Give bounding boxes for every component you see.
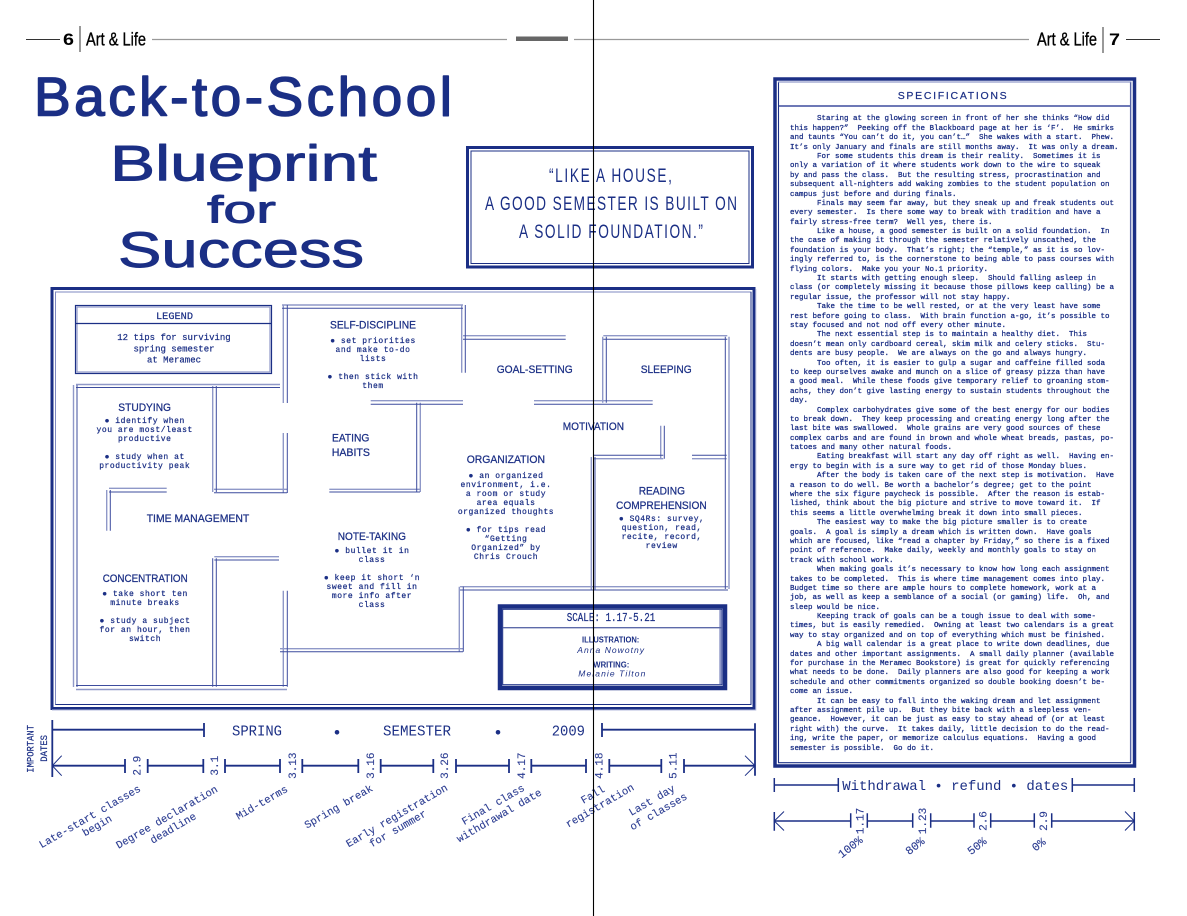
room: self-discipline: ● then stick with	[328, 373, 418, 382]
room: reading comprehension: question, read,	[622, 524, 702, 533]
room: sleeping: SLEEPING	[641, 364, 692, 376]
room: organization: “Getting	[485, 535, 527, 544]
room: eating habits	[332, 432, 370, 459]
room: motivation: MOTIVATION	[563, 421, 624, 433]
room: note-taking: ● keep it short ‘n	[324, 574, 420, 583]
room: reading comprehension: COMPREHENSION	[616, 500, 707, 512]
floor plan walls	[74, 305, 729, 690]
refund percentages: 80%	[903, 835, 928, 859]
room: organization	[458, 454, 554, 562]
title: Back-to-School	[34, 66, 452, 128]
room: studying	[97, 402, 193, 471]
room: reading comprehension: review	[646, 542, 678, 551]
room: concentration: ● study a subject	[100, 617, 190, 626]
title	[34, 66, 452, 278]
date ticks: 4.18	[594, 752, 606, 779]
room: organization: ● an organized	[469, 472, 543, 481]
room: self-discipline: them	[362, 382, 384, 391]
room: studying: STUDYING	[118, 402, 171, 414]
semester banner: 2009	[552, 724, 585, 740]
date descriptions: Late-start classes	[38, 784, 143, 852]
date descriptions: Early registration	[345, 783, 450, 851]
room: eating habits: EATING	[332, 432, 369, 444]
room: reading comprehension	[616, 486, 707, 551]
room: self-discipline: SELF-DISCIPLINE	[330, 319, 416, 331]
room: note-taking: ● bullet it in	[335, 547, 409, 556]
date descriptions: Degree declaration	[115, 784, 220, 852]
room: concentration: ● take short ten	[102, 590, 188, 599]
blueprint panel frame	[52, 288, 756, 710]
date descriptions: Spring break	[303, 783, 376, 832]
date descriptions: Final class	[460, 783, 527, 829]
refund percentages: 100%	[836, 834, 866, 862]
withdrawal date ticks: 2.6	[978, 811, 990, 831]
date descriptions	[38, 782, 690, 852]
room: studying: productivity peak	[99, 462, 190, 471]
title: Success	[118, 222, 364, 278]
date descriptions: registration	[564, 782, 637, 831]
timeline rules	[52, 720, 755, 777]
specifications panel frame	[775, 79, 1134, 766]
room: note-taking: class	[359, 556, 385, 565]
room: note-taking: NOTE-TAKING	[338, 531, 406, 543]
date descriptions: Last day	[627, 783, 678, 819]
withdrawal date ticks	[856, 808, 1051, 834]
refund percentages: 50%	[965, 835, 990, 859]
room: organization: Organized” by	[471, 544, 541, 553]
center page fold line	[592, 0, 594, 916]
room: organization: a room or study	[466, 490, 546, 499]
room: concentration: CONCENTRATION	[103, 573, 188, 585]
date ticks: 2.9	[132, 756, 144, 776]
page header left: Art & Life	[86, 30, 146, 50]
side label: important dates: IMPORTANT	[26, 725, 38, 773]
date descriptions: Mid-terms	[235, 784, 290, 823]
room: goal-setting: GOAL-SETTING	[497, 364, 573, 376]
room: organization: area equals	[477, 499, 535, 508]
withdrawal rules	[774, 778, 1134, 831]
legend box: at Meramec	[147, 355, 201, 365]
room: self-discipline: ● set priorities	[330, 337, 416, 346]
page header right: 7	[1109, 30, 1120, 49]
side label: important dates	[26, 725, 51, 773]
room: reading comprehension: recite, record,	[622, 533, 702, 542]
room: eating habits: HABITS	[332, 447, 370, 459]
room: concentration: switch	[129, 635, 161, 644]
date ticks: 5.11	[668, 752, 680, 779]
scale and credits box: ILLUSTRATION:	[582, 635, 639, 644]
withdrawal date ticks: 1.23	[918, 808, 930, 834]
date descriptions: of classes	[628, 792, 690, 834]
date descriptions: deadline	[149, 811, 199, 847]
date ticks: 3.26	[440, 752, 452, 779]
date ticks	[132, 752, 680, 779]
date descriptions: for summer	[368, 809, 429, 851]
semester banner: SPRING	[232, 724, 282, 740]
scale and credits box: Anna Nowotny	[576, 645, 645, 655]
legend box	[76, 306, 272, 374]
room: organization: environment, i.e.	[461, 481, 551, 490]
room: concentration: minute breaks	[110, 599, 180, 608]
room: studying: ● identify when	[105, 417, 185, 426]
room: self-discipline: lists	[360, 355, 386, 364]
date ticks: 3.16	[366, 752, 378, 779]
withdrawal date ticks: 1.17	[856, 808, 868, 834]
legend box: 12 tips for surviving	[117, 333, 231, 343]
refund percentages: 0%	[1030, 836, 1049, 855]
date descriptions: withdrawal date	[455, 788, 544, 846]
scale and credits box: SCALE: 1.17-5.21	[567, 612, 655, 625]
date descriptions: Fall	[579, 784, 608, 807]
withdrawal banner: Withdrawal • refund • dates	[842, 779, 1068, 795]
room: organization: ● for tips read	[466, 526, 546, 535]
pull quote box: “LIKE A HOUSE,	[549, 165, 672, 187]
room: self-discipline	[328, 319, 418, 391]
specifications article text: Staring at the glowing screen in front of her she thinks “How did this happen?” Peeking off the Blackboard page at her is ‘F’. He smirks and taunts “You can’t do it, you can’t…” She wakes with a start. Phew. It’s only January and finals are still months away. It was only a dream. For some students this dream is their reality. Sometimes it is only a variation of it where students work down to the wire to squeak by and pass the class. But the resulting stress, procrastination and subsequent all-nighters add waking zombies to the student population on campus just before and during finals. Finals may seem far away, but they sneak up and freak students out every semester. Is there some way to break with tradition and have a fairly stress-free term? Well yes, there is. Like a house, a good semester is built on a solid foundation. In the case of making it through the semester relatively unscathed, the foundation is your body. That’s right; the “temple,” as it is so lov- ingly referred to, is the cornerstone to being able to pass courses with flying colors. Make you your No.1 priority. It starts with getting enough sleep. Should falling asleep in class (or completely missing it because those pillows keep calling) be a regular issue, the professor will not stay happy. Take the time to be well rested, or at the very least have some rest before going to class. With brain function a-go, it’s possible to stay focused and not nod off every other minute. The next essential step is to maintain a healthy diet. This doesn’t mean only cardboard cereal, skim milk and celery sticks. Stu- dents are busy people. We are always on the go and always hungry. Too often, it is easier to gulp a sugar and caffeine filled soda to keep ourselves awake and munch on a slice of greasy pizza than have a good meal. While these foods give temporary relief to groaning stom- achs, they don’t give lasting energy to sustain students throughout the day. Complex carbohydrates give some of the best energy for our bodies to break down. They keep processing and creating energy long after the last bite was swallowed. Whole grains are very good sources of these complex carbs and are found in brown and whole wheat breads, pastas, po- tatoes and many other natural foods. Eating breakfast will start any day off right as well. Having en- ergy to begin with is a sure way to get rid of those Monday blues. After the body is taken care of the next step is motivation. Have a reason to do well. Be worth a bachelor’s degree; get to the point where the six figure paycheck is possible. After the reason is estab- lished, think about the big picture and strive to move toward it. If this seems a little overwhelming break it down into small pieces. The easiest way to make the big picture smaller is to create goals. A goal is simply a dream which is written down. Have goals which are focused, like “read a chapter by Friday,” so there is a fixed point of reference. Make daily, weekly and monthly goals to stay on track with school work. When making goals it’s necessary to know how long each assignment takes to be completed. This is where time management comes into play. Budget time so there are ample hours to complete homework, work at a job, as well as keep a semblance of a social (or gaming) life. Oh, and sleep would be nice. Keeping track of goals can be a tough issue to deal with some- times, but is easily remedied. Owning at least two calendars is a great way to stay organized and on top of everything which must be finished. A big wall calendar is a great place to write down deadlines, due dates and other important assignments. A small daily planner (available for purchase in the Meramec Bookstore) is great for quickly referencing what needs to be done. Daily planners are also good for keeping a work schedule and other commitments organized so double booking doesn’t be- come an issue. It can be easy to fall into the waking dream and let assignment after assignment pile up. But they bite bac	[790, 115, 1119, 753]
room: concentration: for an hour, then	[100, 626, 190, 635]
room: time management: TIME MANAGEMENT	[147, 513, 250, 525]
scale and credits box: WRITING:	[593, 660, 629, 669]
room: note-taking: more info after	[332, 592, 412, 601]
room: organization: organized thoughts	[458, 508, 554, 517]
title: Blueprint	[110, 136, 377, 192]
refund percentages	[836, 834, 1049, 862]
room: organization: Chris Crouch	[474, 553, 538, 562]
page header left: 6	[63, 30, 74, 49]
side label: important dates: DATES	[39, 735, 51, 762]
date ticks: 4.17	[517, 752, 529, 779]
legend box: spring semester	[133, 344, 215, 354]
withdrawal date ticks: 2.9	[1039, 811, 1051, 831]
room: reading comprehension: READING	[639, 486, 685, 498]
page header left	[26, 26, 1029, 52]
scale and credits box	[500, 606, 725, 688]
specifications panel frame: SPECIFICATIONS	[898, 90, 1007, 102]
legend box: LEGEND	[156, 311, 193, 323]
room: reading comprehension: ● SQ4Rs: survey,	[619, 515, 705, 524]
room: studying: ● study when at	[105, 453, 185, 462]
page header right: Art & Life	[1037, 30, 1097, 50]
semester banner: SEMESTER	[383, 724, 451, 740]
room: concentration	[100, 573, 190, 644]
pull quote box	[468, 148, 752, 267]
semester banner	[232, 724, 585, 740]
scale and credits box: Melanie Tilton	[578, 668, 646, 678]
title: for	[207, 190, 277, 232]
room: studying: you are most/least	[97, 426, 193, 435]
room: organization: ORGANIZATION	[467, 454, 545, 466]
room: note-taking: sweet and fill in	[327, 583, 417, 592]
pull quote box: A SOLID FOUNDATION.”	[519, 221, 703, 243]
date ticks: 3.1	[210, 755, 222, 776]
pull quote box: A GOOD SEMESTER IS BUILT ON	[485, 193, 737, 215]
page header right	[1037, 27, 1160, 53]
important dates timeline	[26, 720, 755, 852]
date ticks: 3.13	[288, 752, 300, 779]
room: note-taking	[324, 531, 420, 610]
room: studying: productive	[118, 435, 171, 444]
room: note-taking: class	[359, 601, 385, 610]
room: self-discipline: and make to-do	[336, 346, 410, 355]
withdrawal refund dates timeline	[774, 778, 1134, 862]
date descriptions: begin	[81, 814, 115, 840]
